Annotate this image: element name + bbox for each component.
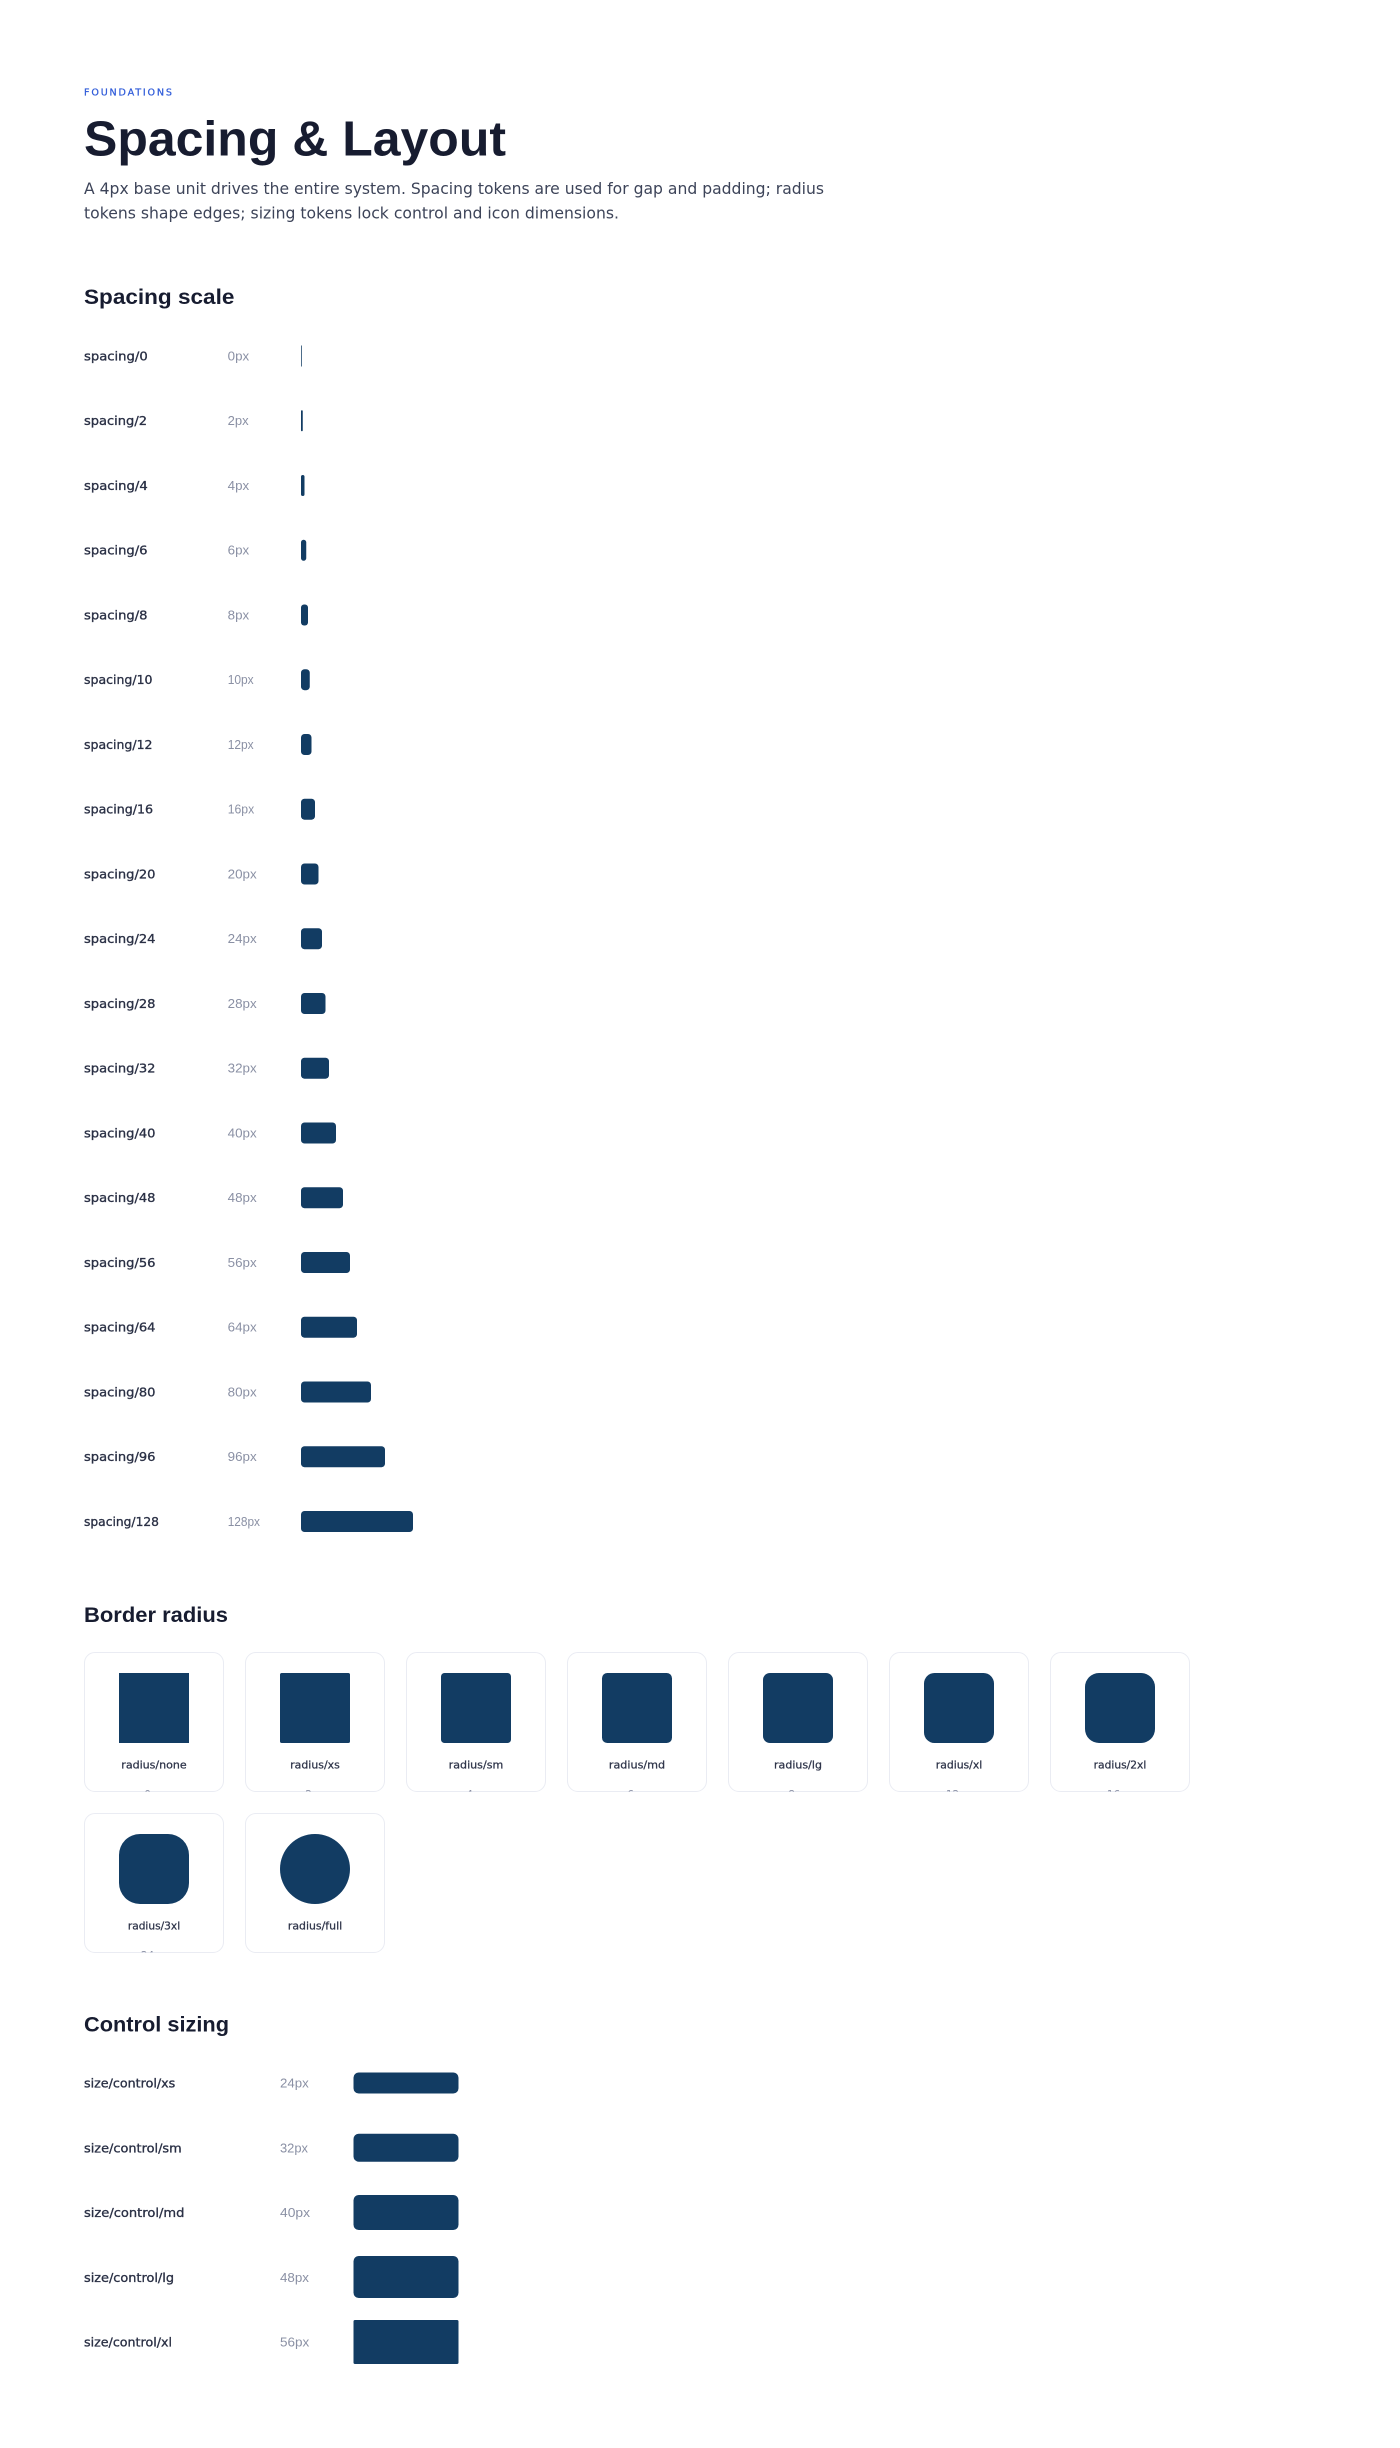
- card: radius/2xl: radius/2xl: [1094, 1760, 1146, 1772]
- row: spacing/6: spacing/6: [84, 544, 148, 558]
- row: spacing/8: [84, 604, 308, 626]
- row: spacing/12: 12px: [228, 737, 254, 752]
- description: tokens shape edges; sizing tokens lock control and icon dimensions.: [84, 204, 619, 223]
- card: radius/xs: [246, 1652, 384, 1801]
- card: radius/xs: 2px: [305, 1789, 325, 1801]
- card: radius/2xl: [1050, 1652, 1190, 1801]
- panel: control sizing: [84, 2012, 458, 2364]
- row: spacing/28: spacing/28: [84, 997, 156, 1011]
- row: spacing/16: spacing/16: [84, 803, 153, 817]
- row: spacing/2: 2px: [228, 413, 249, 428]
- card: radius/2xl: 16px: [1107, 1789, 1133, 1801]
- row: spacing/20: 20px: [228, 866, 257, 882]
- card: radius/lg: 8px: [788, 1789, 808, 1801]
- card: radius/none: radius/none: [121, 1760, 187, 1772]
- row: size/control/xl: 56px: [280, 2334, 310, 2350]
- row: spacing/4: [84, 475, 304, 496]
- row: spacing/32: [84, 1058, 329, 1079]
- row: size/control/lg: [84, 2256, 458, 2298]
- row: spacing/2: spacing/2: [84, 414, 147, 428]
- row: spacing/6: 6px: [228, 543, 250, 558]
- row: spacing/2: [84, 410, 303, 431]
- row: spacing/28: [84, 993, 326, 1014]
- card: radius/xs: radius/xs: [290, 1760, 340, 1772]
- row: spacing/40: spacing/40: [84, 1126, 156, 1140]
- heading: border radius: Border radius: [84, 1603, 228, 1627]
- row: size/control/sm: size/control/sm: [84, 2141, 182, 2155]
- row: spacing/12: [84, 734, 312, 755]
- heading: control sizing: Control sizing: [84, 2012, 229, 2036]
- row: size/control/lg: 48px: [280, 2270, 310, 2285]
- eyebrow: FOUNDATIONS: [84, 87, 172, 98]
- row: spacing/0: spacing/0: [84, 350, 148, 364]
- row: spacing/48: spacing/48: [84, 1191, 156, 1205]
- row: spacing/96: 96px: [228, 1449, 257, 1464]
- row: spacing/56: [84, 1252, 350, 1273]
- row: spacing/24: [84, 928, 322, 949]
- row: size/control/xs: [84, 2072, 458, 2094]
- row: spacing/4: 4px: [228, 478, 250, 493]
- row: spacing/24: 24px: [228, 931, 257, 946]
- row: size/control/sm: [84, 2134, 458, 2162]
- card: radius/3xl: 24px: [141, 1950, 167, 1962]
- card: radius/full: radius/full: [288, 1920, 342, 1932]
- row: spacing/48: [84, 1187, 343, 1208]
- row: spacing/28: 28px: [228, 996, 257, 1011]
- row: spacing/96: spacing/96: [84, 1450, 156, 1464]
- row: spacing/80: 80px: [228, 1384, 257, 1400]
- row: spacing/128: [84, 1511, 413, 1532]
- card: radius/none: 0px: [144, 1789, 164, 1801]
- row: spacing/56: 56px: [228, 1255, 257, 1270]
- row: spacing/40: 40px: [228, 1126, 257, 1140]
- card: radius/sm: radius/sm: [449, 1760, 503, 1772]
- card: radius/md: 6px: [627, 1789, 647, 1801]
- row: size/control/xs: size/control/xs: [84, 2077, 175, 2091]
- row: size/control/sm: 32px: [280, 2140, 308, 2155]
- card: radius/sm: [406, 1652, 546, 1801]
- card: radius/lg: [728, 1652, 868, 1801]
- card: radius/xl: [890, 1652, 1028, 1801]
- panel: spacing scale: [84, 285, 413, 1532]
- row: size/control/xl: [84, 2320, 458, 2364]
- row: spacing/80: [84, 1382, 371, 1402]
- row: spacing/128: spacing/128: [84, 1515, 159, 1529]
- row: spacing/8: 8px: [228, 608, 250, 622]
- row: spacing/4: spacing/4: [84, 479, 148, 493]
- row: size/control/xl: size/control/xl: [84, 2336, 172, 2350]
- row: spacing/20: spacing/20: [84, 868, 156, 882]
- row: spacing/32: 32px: [228, 1061, 257, 1076]
- row: spacing/0: [84, 346, 302, 366]
- card: radius/md: [568, 1652, 706, 1801]
- row: spacing/6: [84, 540, 306, 561]
- description: A 4px base unit drives the entire system. Spacing tokens are used for gap and padding; radius: [84, 179, 824, 198]
- row: spacing/64: spacing/64: [84, 1321, 156, 1335]
- card: radius/xl: radius/xl: [936, 1760, 982, 1772]
- heading: spacing scale: Spacing scale: [84, 285, 234, 309]
- row: spacing/32: spacing/32: [84, 1062, 156, 1076]
- row: size/control/lg: size/control/lg: [84, 2271, 174, 2285]
- row: spacing/128: 128px: [228, 1514, 260, 1529]
- row: spacing/0: 0px: [228, 348, 250, 364]
- card: radius/none: [84, 1652, 224, 1801]
- row: spacing/48: 48px: [228, 1190, 257, 1205]
- title: Spacing & Layout: [84, 112, 506, 166]
- row: spacing/16: [84, 799, 315, 820]
- row: spacing/20: [84, 864, 318, 884]
- panel: border radius: [84, 1603, 1190, 1962]
- row: size/control/md: size/control/md: [84, 2206, 184, 2220]
- row: spacing/40: [84, 1122, 336, 1144]
- row: spacing/16: 16px: [228, 802, 255, 817]
- row: spacing/24: spacing/24: [84, 932, 156, 946]
- row: size/control/xs: 24px: [280, 2076, 309, 2091]
- card: radius/md: radius/md: [609, 1760, 665, 1772]
- card: radius/3xl: [84, 1814, 224, 1962]
- row: spacing/80: spacing/80: [84, 1386, 156, 1400]
- row: spacing/8: spacing/8: [84, 608, 148, 622]
- row: spacing/64: 64px: [228, 1320, 257, 1335]
- row: spacing/12: spacing/12: [84, 738, 152, 752]
- row: spacing/64: [84, 1317, 357, 1338]
- row: spacing/10: [84, 669, 310, 690]
- card: radius/full: [246, 1814, 384, 1952]
- row: spacing/96: [84, 1446, 385, 1467]
- card: radius/sm: 4px: [466, 1789, 486, 1801]
- card: radius/xl: 12px: [946, 1789, 972, 1801]
- row: spacing/56: spacing/56: [84, 1256, 156, 1270]
- card: radius/lg: radius/lg: [774, 1760, 822, 1772]
- page header: [84, 87, 824, 223]
- row: size/control/md: [84, 2195, 458, 2230]
- row: size/control/md: 40px: [280, 2205, 311, 2220]
- card: radius/3xl: radius/3xl: [128, 1920, 180, 1932]
- row: spacing/10: spacing/10: [84, 673, 152, 687]
- row: spacing/10: 10px: [228, 672, 254, 687]
- description: [84, 179, 824, 223]
